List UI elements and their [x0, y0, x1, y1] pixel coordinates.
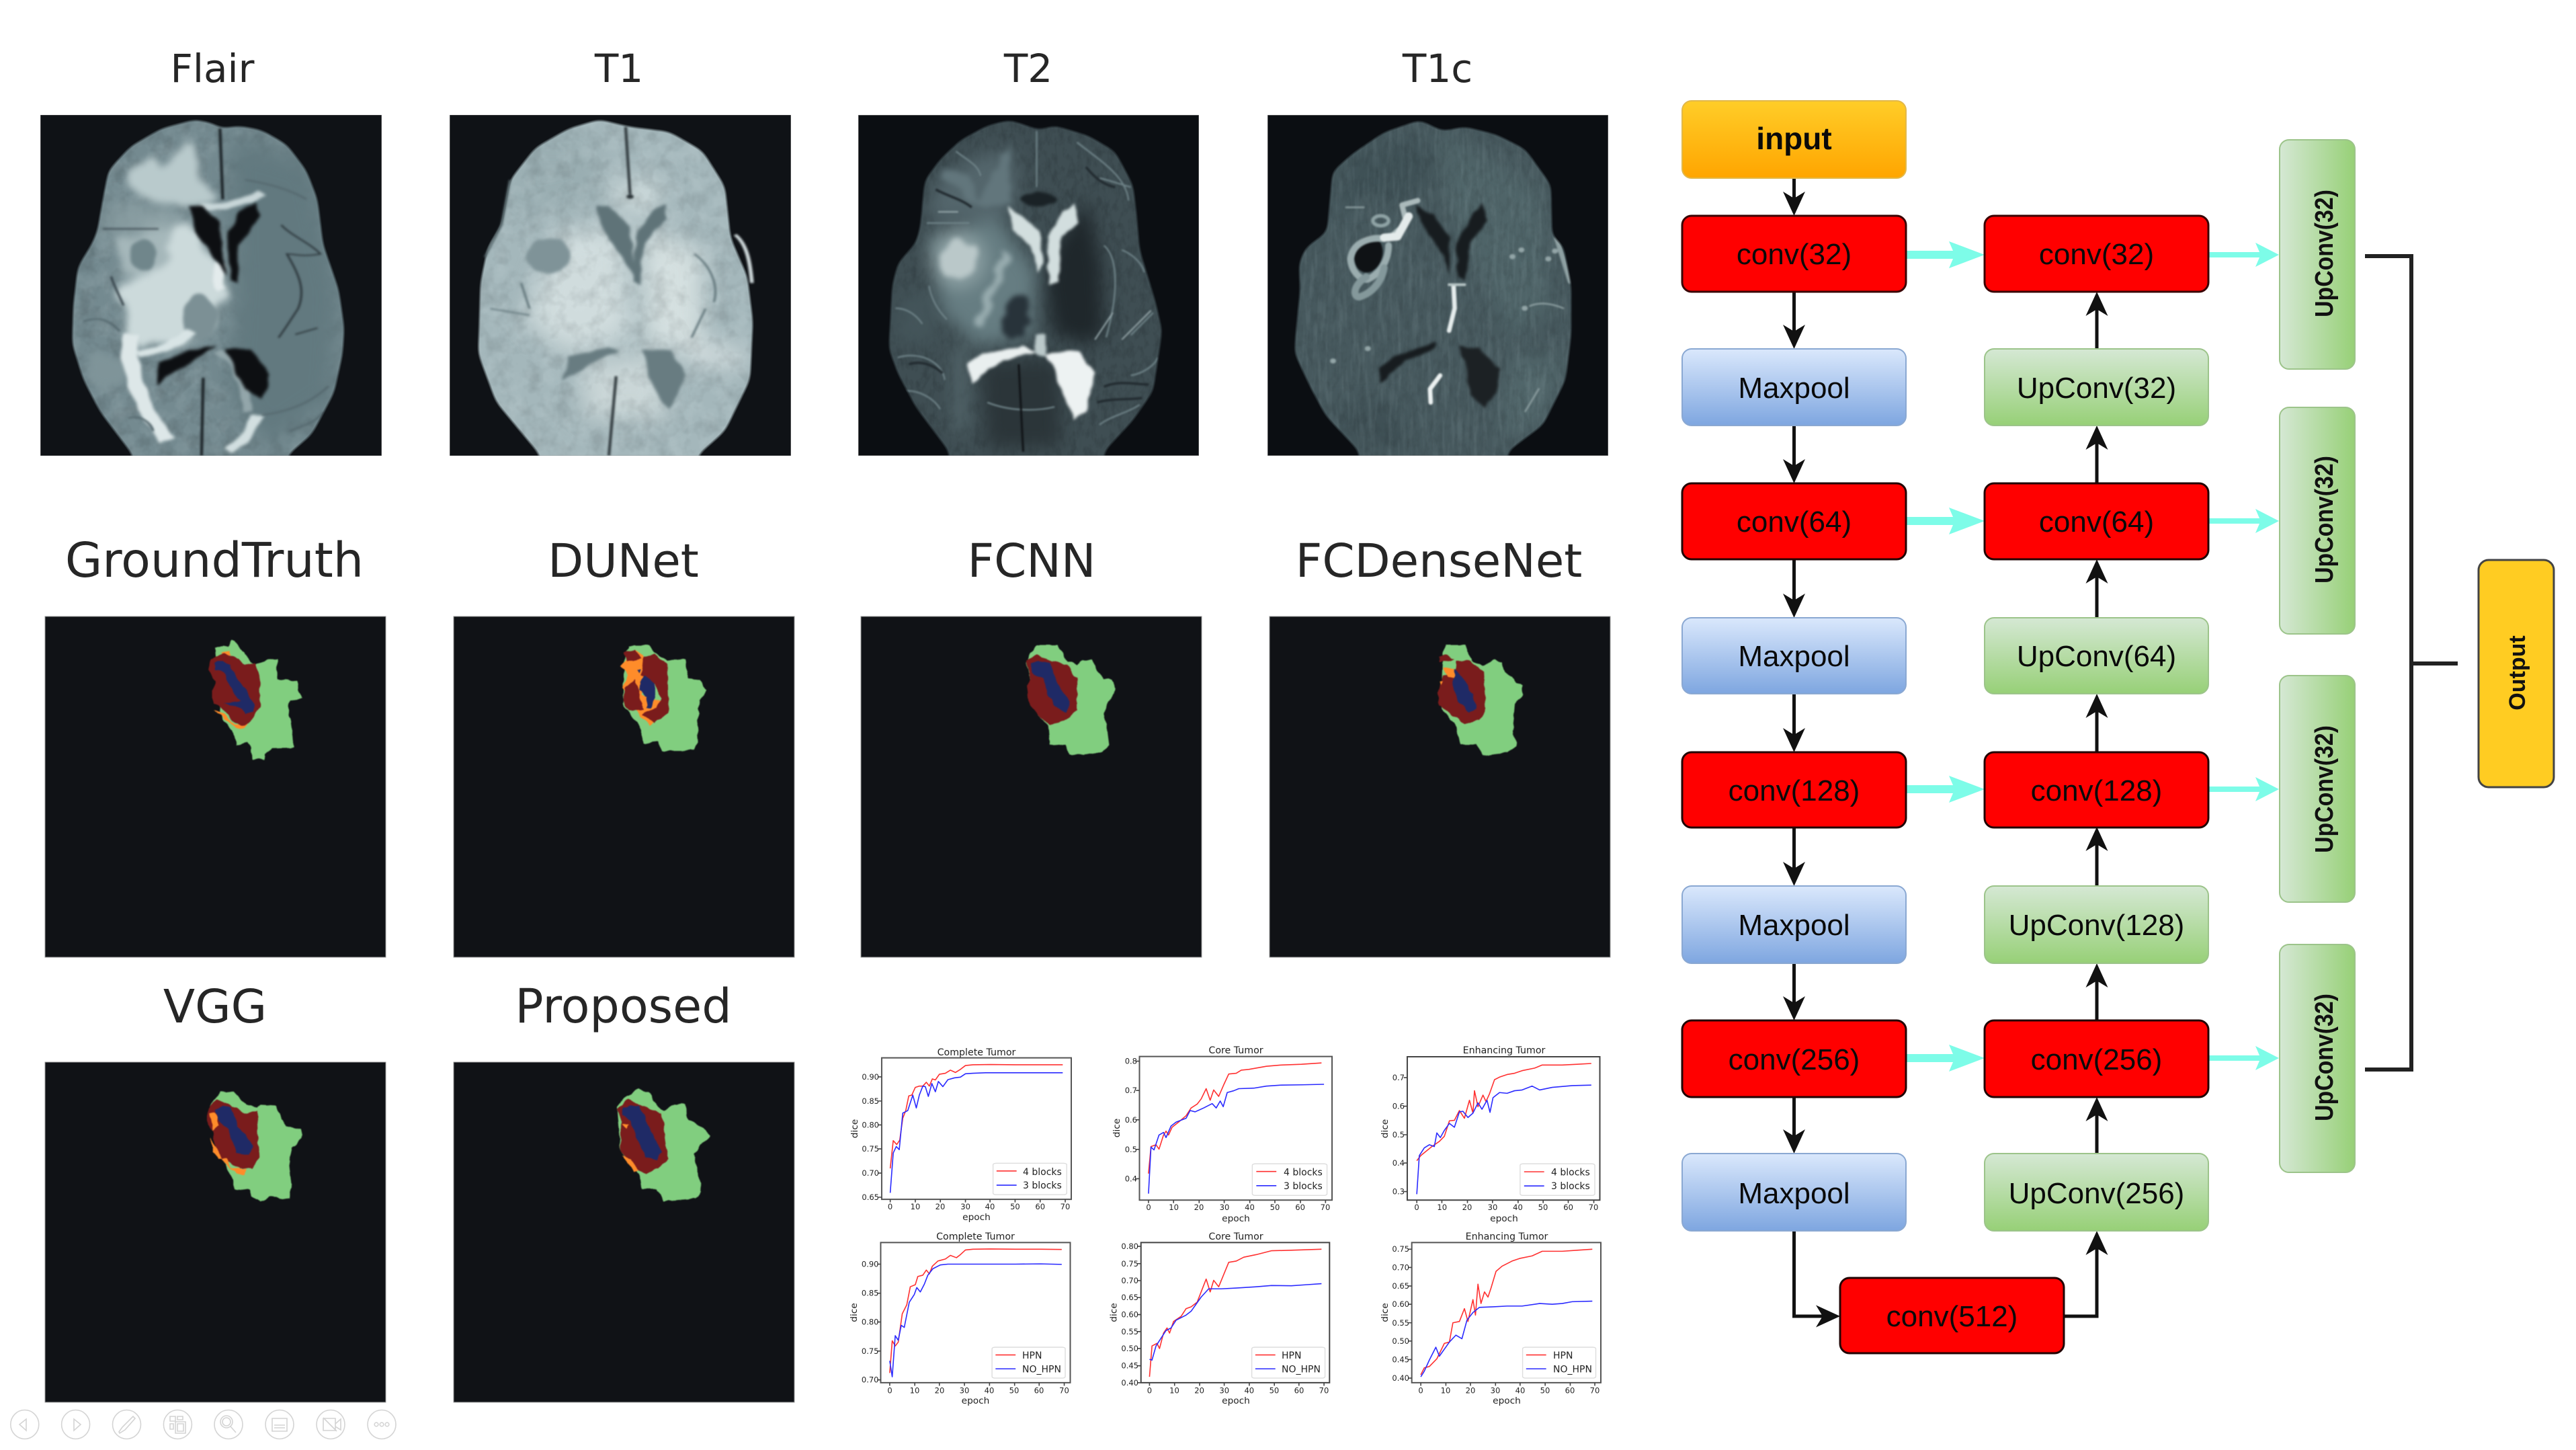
chart: Core Tumor, blocks: 30	[1220, 1203, 1229, 1212]
chart: Enhancing Tumor, HPN: 0.75	[1392, 1244, 1409, 1254]
chart: Complete Tumor, HPN: dice	[849, 1303, 860, 1322]
chart: Complete Tumor, HPN: 60	[1034, 1386, 1044, 1396]
chart: Complete Tumor, blocks: Complete Tumor	[938, 1047, 1016, 1058]
chart: Core Tumor, HPN: 30	[1219, 1386, 1229, 1396]
chart: Core Tumor, HPN: 0.55	[1121, 1327, 1138, 1336]
chart: Core Tumor, blocks: dice	[1112, 1119, 1122, 1137]
node: conv(512)	[1840, 1278, 2064, 1353]
node: conv(128) encoder	[1682, 752, 1906, 828]
chart: Core Tumor, blocks: 0.6	[1125, 1115, 1137, 1125]
segmentation mask: DUNet	[454, 616, 794, 957]
title: FCNN: FCNN	[967, 534, 1096, 588]
node: conv(64) encoder	[1682, 483, 1906, 559]
chart: Enhancing Tumor, blocks: 0.5	[1393, 1130, 1405, 1139]
node: conv(128) decoder: conv(128)	[2031, 774, 2162, 807]
chart: Complete Tumor, blocks: 4 blocks	[1023, 1167, 1062, 1178]
chart: Core Tumor, HPN: 0.65	[1121, 1293, 1138, 1302]
title: T2: T2	[1003, 46, 1052, 91]
chart: Enhancing Tumor, HPN: 0.40	[1392, 1373, 1409, 1383]
arrows: encoder column downward	[1794, 178, 1831, 1316]
node: conv(32) encoder: conv(32)	[1737, 238, 1852, 271]
title: T1: T1	[594, 46, 643, 91]
side block: UpConv(32) row 4	[2280, 944, 2355, 1172]
arrows: decoder column upward	[2064, 301, 2097, 1316]
chart: Enhancing Tumor, blocks: 60	[1563, 1203, 1573, 1212]
chart: Core Tumor, HPN: 0.45	[1121, 1361, 1138, 1371]
chart: Core Tumor, blocks: 0.4	[1125, 1174, 1137, 1183]
node: conv(256) decoder	[1985, 1020, 2208, 1097]
node: conv(128) encoder: conv(128)	[1729, 774, 1860, 807]
chart: Complete Tumor, blocks: 10	[911, 1202, 920, 1211]
chart: Core Tumor, HPN: HPN	[1282, 1351, 1301, 1361]
node: conv(256) decoder: conv(256)	[2031, 1043, 2162, 1076]
MRI image: T1	[450, 115, 791, 456]
node: Maxpool 3	[1682, 886, 1906, 963]
chart: Core Tumor, blocks	[1112, 1045, 1332, 1224]
chart: Enhancing Tumor, HPN: 0.70	[1392, 1262, 1409, 1272]
segmentation mask: FCDenseNet	[1270, 616, 1610, 957]
node: conv(512): conv(512)	[1886, 1300, 2018, 1333]
side block: UpConv(32) row 2: UpConv(32)	[2309, 456, 2338, 583]
chart: Complete Tumor, blocks: dice	[849, 1119, 860, 1138]
chart: Complete Tumor, HPN: 0	[887, 1386, 892, 1396]
chart: Enhancing Tumor, blocks: 40	[1513, 1203, 1523, 1212]
chart: Complete Tumor, blocks	[849, 1047, 1071, 1223]
chart: Core Tumor, HPN: 0.75	[1121, 1259, 1138, 1268]
MRI image: T2	[858, 115, 1199, 456]
chart: Core Tumor, HPN: 20	[1194, 1386, 1204, 1396]
title: DUNet: DUNet	[548, 534, 699, 588]
chart: Core Tumor, HPN: 0	[1147, 1386, 1152, 1396]
toolbar: viewer control icons	[11, 1410, 396, 1439]
chart: Core Tumor, HPN: NO_HPN	[1282, 1365, 1321, 1375]
chart: Core Tumor, HPN: 10	[1169, 1386, 1179, 1396]
chart: Complete Tumor, HPN: 0.70	[862, 1375, 879, 1385]
title: GroundTruth: GroundTruth	[65, 532, 364, 588]
node: Maxpool 1	[1682, 349, 1906, 426]
chart: Core Tumor, blocks: epoch	[1222, 1213, 1250, 1224]
chart: Core Tumor, HPN: 0.40	[1121, 1378, 1138, 1387]
node: UpConv(128)	[1985, 886, 2208, 963]
MRI image: Flair	[40, 115, 382, 456]
chart: Complete Tumor, HPN: 50	[1009, 1386, 1019, 1396]
chart: Enhancing Tumor, blocks: 0.7	[1393, 1073, 1405, 1082]
node: conv(32) encoder	[1682, 216, 1906, 292]
chart: Complete Tumor, HPN: HPN	[1022, 1351, 1042, 1361]
bracket connector to output	[2365, 256, 2458, 1070]
chart: Core Tumor, blocks: 0.5	[1125, 1145, 1137, 1154]
chart: Enhancing Tumor, blocks: 4 blocks	[1551, 1167, 1590, 1178]
node: UpConv(256): UpConv(256)	[2009, 1177, 2184, 1210]
chart: Enhancing Tumor, HPN	[1380, 1232, 1601, 1406]
node: conv(64) decoder: conv(64)	[2039, 506, 2154, 538]
node: conv(256) encoder	[1682, 1020, 1906, 1097]
chart: Core Tumor, blocks: 40	[1245, 1203, 1255, 1212]
chart: Enhancing Tumor, HPN: 70	[1590, 1386, 1599, 1396]
chart: Complete Tumor, HPN: 0.90	[862, 1260, 879, 1269]
chart: Complete Tumor, HPN	[849, 1232, 1071, 1406]
side block: UpConv(32) row 3: UpConv(32)	[2309, 725, 2338, 853]
chart: Enhancing Tumor, blocks: 0.4	[1393, 1158, 1405, 1168]
chart: Core Tumor, blocks: 70	[1321, 1203, 1330, 1212]
segmentation mask: Proposed	[454, 1062, 794, 1402]
chart: Complete Tumor, HPN: NO_HPN	[1022, 1365, 1061, 1375]
node: Output	[2479, 560, 2554, 787]
node: conv(256) encoder: conv(256)	[1729, 1043, 1860, 1076]
chart: Complete Tumor, HPN: 70	[1059, 1386, 1069, 1396]
side block: UpConv(32) row 1: UpConv(32)	[2309, 190, 2338, 317]
chart: Complete Tumor, blocks: 0.65	[862, 1193, 879, 1202]
chart: Enhancing Tumor, blocks: Enhancing Tumor	[1463, 1045, 1546, 1056]
node: input	[1682, 101, 1906, 178]
chart: Core Tumor, blocks: 10	[1169, 1203, 1179, 1212]
chart: Complete Tumor, HPN: 0.85	[862, 1289, 879, 1298]
chart: Complete Tumor, blocks: 50	[1010, 1202, 1020, 1211]
chart: Enhancing Tumor, HPN: 40	[1515, 1386, 1525, 1396]
chart: Enhancing Tumor, blocks	[1380, 1045, 1599, 1224]
title: T1c: T1c	[1402, 46, 1472, 91]
chart: Complete Tumor, blocks: 40	[985, 1202, 995, 1211]
node: Maxpool 2: Maxpool	[1738, 640, 1850, 673]
chart: Complete Tumor, blocks: 60	[1035, 1202, 1045, 1211]
node: UpConv(32): UpConv(32)	[2017, 372, 2176, 405]
chart: Complete Tumor, HPN: 0.80	[862, 1318, 879, 1327]
node: Maxpool 1: Maxpool	[1738, 372, 1850, 405]
node: UpConv(128): UpConv(128)	[2009, 909, 2184, 942]
node: conv(32) decoder: conv(32)	[2039, 238, 2154, 271]
node: conv(128) decoder	[1985, 752, 2208, 828]
side block: UpConv(32) row 1	[2280, 140, 2355, 369]
chart: Enhancing Tumor, HPN: HPN	[1553, 1351, 1573, 1361]
node: UpConv(64): UpConv(64)	[2017, 640, 2176, 673]
chart: Core Tumor, HPN: 0.70	[1121, 1276, 1138, 1285]
segmentation mask: GroundTruth	[45, 616, 386, 957]
chart: Core Tumor, blocks: Core Tumor	[1208, 1045, 1263, 1056]
title: FCDenseNet: FCDenseNet	[1296, 534, 1582, 588]
chart: Core Tumor, HPN: 0.50	[1121, 1344, 1138, 1353]
chart: Core Tumor, HPN	[1108, 1232, 1329, 1406]
chart: Enhancing Tumor, HPN: 0.50	[1392, 1336, 1409, 1346]
chart: Enhancing Tumor, blocks: 10	[1437, 1203, 1447, 1212]
chart: Core Tumor, blocks: 20	[1194, 1203, 1204, 1212]
chart: Complete Tumor, blocks: 70	[1061, 1202, 1070, 1211]
node: input: input	[1756, 121, 1832, 156]
node: Maxpool 4	[1682, 1154, 1906, 1231]
title: Proposed: Proposed	[515, 979, 732, 1034]
chart: Enhancing Tumor, blocks: 20	[1462, 1203, 1472, 1212]
chart: Complete Tumor, blocks: 30	[960, 1202, 970, 1211]
chart: Core Tumor, HPN: 0.60	[1121, 1310, 1138, 1319]
chart: Enhancing Tumor, HPN: 0	[1418, 1386, 1423, 1396]
chart: Core Tumor, HPN: 60	[1294, 1386, 1304, 1396]
chart: Enhancing Tumor, HPN: 20	[1466, 1386, 1475, 1396]
chart: Enhancing Tumor, blocks: epoch	[1490, 1213, 1518, 1224]
side block: UpConv(32) row 4: UpConv(32)	[2309, 994, 2338, 1121]
chart: Enhancing Tumor, HPN: 0.60	[1392, 1299, 1409, 1309]
chart: Enhancing Tumor, HPN: epoch	[1493, 1396, 1521, 1406]
node: Maxpool 2	[1682, 618, 1906, 694]
chart: Core Tumor, blocks: 0.8	[1125, 1057, 1137, 1066]
chart: Core Tumor, HPN: 40	[1244, 1386, 1254, 1396]
chart: Enhancing Tumor, blocks: dice	[1380, 1119, 1390, 1138]
chart: Core Tumor, blocks: 4 blocks	[1284, 1167, 1323, 1178]
node: conv(64) decoder	[1985, 483, 2208, 559]
node: conv(32) decoder	[1985, 216, 2208, 292]
chart: Core Tumor, blocks: 0.7	[1125, 1086, 1137, 1095]
node: UpConv(32)	[1985, 349, 2208, 426]
chart: Enhancing Tumor, HPN: 30	[1491, 1386, 1500, 1396]
chart: Enhancing Tumor, HPN: 0.65	[1392, 1281, 1409, 1291]
chart: Complete Tumor, blocks: 0	[888, 1202, 892, 1211]
segmentation mask: FCNN	[861, 616, 1202, 957]
title: Flair: Flair	[171, 46, 255, 91]
node: Maxpool 3: Maxpool	[1738, 909, 1850, 942]
chart: Complete Tumor, HPN: 0.75	[862, 1346, 879, 1356]
chart: Enhancing Tumor, HPN: 10	[1441, 1386, 1450, 1396]
side block: UpConv(32) row 2	[2280, 407, 2355, 634]
chart: Enhancing Tumor, HPN: dice	[1380, 1303, 1390, 1322]
node: conv(64) encoder: conv(64)	[1737, 506, 1852, 538]
chart: Core Tumor, HPN: epoch	[1222, 1396, 1250, 1406]
title: VGG: VGG	[163, 980, 267, 1034]
arrows: cyan skip connections	[1906, 241, 2279, 1072]
chart: Core Tumor, blocks: 0	[1146, 1203, 1151, 1212]
node: Output: Output	[2505, 635, 2530, 711]
chart: Complete Tumor, HPN: 40	[985, 1386, 994, 1396]
chart: Complete Tumor, blocks: epoch	[962, 1212, 991, 1223]
chart: Enhancing Tumor, blocks: 50	[1538, 1203, 1548, 1212]
chart: Core Tumor, HPN: Core Tumor	[1208, 1232, 1263, 1242]
chart: Complete Tumor, blocks: 0.90	[862, 1072, 879, 1082]
chart: Complete Tumor, HPN: 30	[960, 1386, 969, 1396]
node: Maxpool 4: Maxpool	[1738, 1177, 1850, 1210]
chart: Core Tumor, blocks: 3 blocks	[1284, 1181, 1323, 1192]
chart: Enhancing Tumor, HPN: Enhancing Tumor	[1466, 1232, 1548, 1242]
chart: Core Tumor, blocks: 50	[1270, 1203, 1280, 1212]
chart: Complete Tumor, HPN: Complete Tumor	[936, 1232, 1015, 1242]
chart: Complete Tumor, blocks: 0.75	[862, 1144, 879, 1154]
chart: Enhancing Tumor, HPN: 0.45	[1392, 1355, 1409, 1365]
chart: Complete Tumor, blocks: 0.70	[862, 1168, 879, 1178]
node: UpConv(64)	[1985, 618, 2208, 694]
chart: Complete Tumor, HPN: 20	[935, 1386, 944, 1396]
chart: Enhancing Tumor, blocks: 3 blocks	[1551, 1181, 1590, 1192]
chart: Complete Tumor, blocks: 20	[936, 1202, 945, 1211]
chart: Enhancing Tumor, HPN: 50	[1540, 1386, 1550, 1396]
chart: Complete Tumor, HPN: epoch	[962, 1396, 989, 1406]
chart: Complete Tumor, blocks: 3 blocks	[1023, 1180, 1062, 1191]
chart: Enhancing Tumor, blocks: 30	[1488, 1203, 1497, 1212]
chart: Enhancing Tumor, HPN: 60	[1565, 1386, 1575, 1396]
chart: Core Tumor, HPN: 50	[1270, 1386, 1279, 1396]
chart: Core Tumor, blocks: 60	[1295, 1203, 1305, 1212]
chart: Complete Tumor, blocks: 0.85	[862, 1096, 879, 1106]
chart: Core Tumor, HPN: 0.80	[1121, 1242, 1138, 1251]
chart: Core Tumor, HPN: dice	[1108, 1303, 1119, 1322]
chart: Complete Tumor, blocks: 0.80	[862, 1120, 879, 1129]
chart: Core Tumor, HPN: 70	[1319, 1386, 1329, 1396]
chart: Enhancing Tumor, blocks: 0.6	[1393, 1101, 1405, 1111]
chart: Enhancing Tumor, HPN: NO_HPN	[1553, 1365, 1592, 1375]
chart: Enhancing Tumor, blocks: 70	[1589, 1203, 1598, 1212]
chart: Enhancing Tumor, blocks: 0.3	[1393, 1187, 1405, 1197]
chart: Complete Tumor, HPN: 10	[910, 1386, 919, 1396]
segmentation mask: VGG	[45, 1062, 386, 1402]
side block: UpConv(32) row 3	[2280, 676, 2355, 902]
MRI image: T1c	[1268, 115, 1608, 456]
chart: Enhancing Tumor, blocks: 0	[1414, 1203, 1419, 1212]
chart: Enhancing Tumor, HPN: 0.55	[1392, 1318, 1409, 1328]
node: UpConv(256)	[1985, 1154, 2208, 1231]
